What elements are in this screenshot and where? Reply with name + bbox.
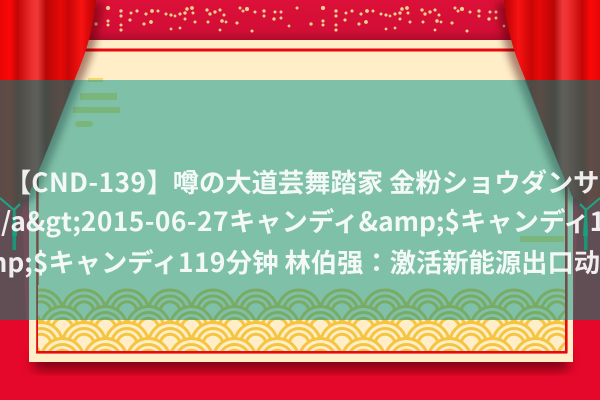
cloud ornament left [73,78,120,127]
wave pattern border [38,285,565,351]
right curtain [497,0,600,320]
cloud ornament right [520,236,564,242]
red top band with gold confetti [0,0,600,41]
card drop shadow on red floor [34,352,568,370]
translucent teal overlay [0,80,600,320]
title line 2: /a&gt;2015-06-27キャンディ&amp;$キャンディ1 [1,200,600,239]
title line 1: 【CND-139】噂の大道芸舞踏家 金粉ショウダンサ [5,161,599,200]
title line 3: mp;$キャンディ119分钟 林伯强：激活新能源出口动 [0,241,600,280]
left curtain [0,0,103,320]
